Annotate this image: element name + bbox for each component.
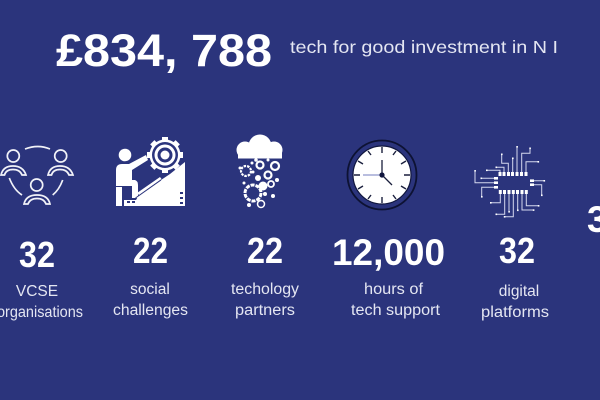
subtitle: tech for good investment in N I [290,37,558,57]
stat: 22 techology partners [231,230,299,319]
icon: people network [1,146,73,204]
stat: 22 techology partners: partners [235,302,295,319]
stat: 22 techology partners: techology [231,281,299,298]
stat: 32 digital platforms: 32 [499,230,535,271]
stat: 32 VCSE organisations [0,234,83,321]
stat: 22 social challenges [113,230,188,319]
icon: person pushing gear uphill [116,137,185,206]
stat: 22 social challenges: challenges [113,302,188,319]
stat: 32 VCSE organisations: VCSE [16,283,58,300]
icon: circuit chip [474,146,545,218]
icon: wall clock [348,140,416,210]
stat: 22 social challenges: social [130,281,170,298]
stat: 22 techology partners: 22 [247,230,283,271]
stat: 32 digital platforms: digital [499,283,539,300]
stat: 22 social challenges: 22 [133,230,168,271]
stat: 32 digital platforms: platforms [481,304,549,321]
stat: 12,000 hours of tech support: hours of [364,281,424,298]
stat: 12,000 hours of tech support: 12,000 [332,232,445,273]
icon: cloud with gears [236,134,282,208]
stat: 12,000 hours of tech support: tech support [351,302,441,319]
title: investment amount: £834, 788 [56,25,272,76]
stat: 12,000 hours of tech support [332,232,445,319]
stat: 32 VCSE organisations: 32 [19,234,55,275]
stat: 32 digital platforms [481,230,549,321]
